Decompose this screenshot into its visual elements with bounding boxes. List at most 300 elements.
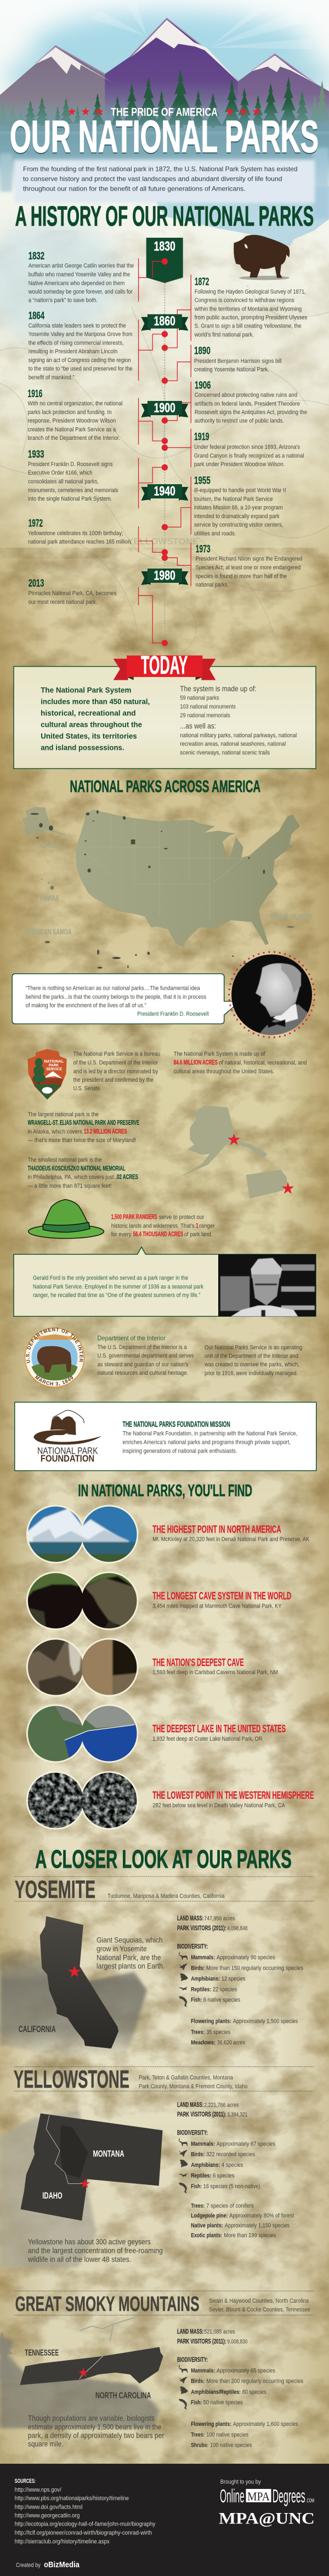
intro paragraph [23, 165, 297, 193]
map shape: Hawaii [41, 879, 54, 890]
yosemite heading band [15, 1875, 314, 1903]
yellowstone heading band: Park, Teton & Gallatin Counties, Montana [139, 2075, 233, 2081]
footer credit [16, 2560, 80, 2569]
callout: Franklin D. Roosevelt quote [12, 974, 240, 1024]
yellowstone statistics: 7 species of conifers [206, 2203, 254, 2210]
text: deepest lake: 1,932 feet deep at Crater Lake National Park, OR [152, 1736, 262, 1742]
footer sources: http://ecotopia.org/ecology-hall-of-fame/john-muir/biography [15, 2521, 156, 2528]
text: 84.6 million acres: 84.6 MILLION ACRES [174, 1058, 218, 1066]
yellowstone map: Montana and Idaho [0, 2110, 163, 2268]
today summary text: and island possessions. [41, 743, 124, 751]
timeline markers [162, 259, 168, 646]
text: 84.6 million acres [174, 1051, 307, 1075]
logo: National Park Foundation [33, 1410, 102, 1464]
entry 1933: into the single National Park System. [28, 496, 112, 502]
entry 1832: a “nation’s park” to save both. [29, 297, 98, 304]
map shape: contiguous United States [76, 810, 300, 1018]
great smoky statistics: 50 native species [203, 2400, 243, 2406]
yellowstone statistics: BIODIVERSITY: [177, 2130, 208, 2137]
text: smallest national park: THADDEUS KOSCIUSZKO NATIONAL MEMORIAL [27, 1164, 125, 1172]
text: largest national park: WRANGELL-ST. ELIAS NATIONAL PARK AND PRESERVE [27, 1119, 139, 1127]
yosemite statistics: PARK VISITORS (2011): [177, 1925, 226, 1932]
decade ribbon: 1860 [141, 314, 188, 331]
yosemite statistics: Amphibians: [191, 1976, 220, 1982]
timeline entries: left column [27, 250, 134, 605]
entry 1973: national parks. [196, 582, 229, 588]
yosemite statistics: Approximately 1,500 species [233, 2018, 298, 2025]
footer sources: http://www.nps.gov/ [15, 2487, 61, 2493]
text: foundation mission: The National Park Foundation, in partnership with the National Park Service, [123, 1431, 297, 1437]
text: operating unit [204, 1344, 302, 1377]
great smoky fact: bears [28, 2414, 164, 2448]
yosemite statistics: Reptiles: [191, 1986, 211, 1993]
yosemite statistics: BIODIVERSITY: [177, 1944, 208, 1950]
great smoky fact: bears: estimate approximately 1,500 bears live in the [28, 2423, 161, 2431]
entry 1832 [28, 250, 134, 304]
footer sponsors: Brought to you by [220, 2479, 261, 2486]
yosemite map: California [0, 1916, 147, 2058]
text: foundation mission [123, 1420, 297, 1454]
great smoky statistics: LAND MASS: [177, 2329, 203, 2336]
entry 1933: 1933 [28, 449, 44, 461]
today system list: ...as well as: [180, 722, 216, 730]
great smoky statistics: BIODIVERSITY: [177, 2357, 208, 2363]
text: foundation mission: enriches America’s national parks and programs through private support, [123, 1439, 291, 1445]
great smoky statistics: 100 native species [210, 2442, 252, 2449]
entry 1973 [196, 543, 302, 588]
great smoky statistics: Birds: [191, 2378, 205, 2385]
today system list: The system is made up of: [180, 685, 257, 693]
yosemite fact: sequoias: grow in Yosemite [97, 1945, 147, 1953]
yellowstone fact: geysers: and the largest concentration of free-roaming [28, 2247, 163, 2255]
footer sponsors: MPA@UNC [219, 2509, 315, 2527]
text: smallest national park [27, 1157, 138, 1189]
yellowstone heading band [14, 2066, 314, 2093]
today summary text: includes more than 450 natural, [41, 697, 150, 705]
decade ribbon: 1980: 1980 [154, 568, 175, 583]
icon: bison [234, 235, 290, 280]
entry 1919: park under President Woodrow Wilson. [194, 461, 285, 468]
great smoky fact: bears: square mile. [28, 2440, 64, 2448]
entry 1916: With no central organization, the national [27, 400, 123, 407]
panel: today [14, 651, 316, 768]
footer sources: http://www.georgecatlin.org [15, 2512, 80, 2519]
text: highest point: Mt. McKinley at 20,320 feet in Denali National Park and Preserve, AK [152, 1536, 310, 1543]
entry 1916: parks lack protection and funding. In [27, 409, 112, 416]
great smoky statistics: Approximately 65 species [217, 2367, 275, 2374]
map label: American Samoa: AMERICAN SAMOA [24, 927, 72, 937]
entry 1864: 1864 [29, 311, 44, 322]
intro paragraph: From the founding of the first national park in 1872, the U.S. National Park System has existed [23, 165, 297, 173]
yosemite statistics: 4,098,848 [227, 1925, 247, 1932]
text: operating unit: unit of the Department of the Interior and [205, 1353, 298, 1359]
text: longest cave: 3,454 miles mapped at Mammoth Cave National Park, KY [152, 1603, 282, 1609]
entry 1955: 1955 [194, 475, 211, 486]
decade ribbon: 1860: 1860 [154, 314, 175, 329]
decade ribbon: 1900: 1900 [154, 400, 175, 415]
text: National Park Service bureau: U.S. Senate. [73, 1086, 101, 1092]
yellowstone statistics: Mammals: [191, 2141, 215, 2147]
entry 1972: Yellowstone celebrates its 100th birthday; [28, 530, 123, 537]
entry 1955 [194, 475, 286, 537]
entry 1916: creates the National Park Service as a [27, 426, 116, 433]
text: operating unit: Our National Parks Service is an operating [205, 1344, 302, 1351]
text: largest national park: 13.2 MILLION ACRES [84, 1128, 127, 1135]
logo: National Park Service arrowhead [28, 1049, 67, 1099]
entry 1916: 1916 [27, 388, 42, 400]
entry 1933: monuments, cemeteries and memorials [28, 487, 118, 494]
text: park rangers: serve to protect our [159, 1214, 205, 1221]
footer sources: http://tclf.org/pioneer/conrad-wirth/biography-conrad-wirth [15, 2530, 152, 2537]
footer sponsors: Online [220, 2486, 245, 2506]
today summary text: historical, recreational and [41, 709, 136, 717]
yosemite fact: sequoias: Giant Sequoias, which [97, 1936, 162, 1944]
entry 1919: Grand Canyon is finally recognized as a national [194, 452, 304, 459]
entry 1832: Native Americans who depended on them [29, 280, 124, 286]
entry 1872: Congress is convinced to withdraw regions [195, 297, 294, 304]
yellowstone statistics: Lodgepole pine: [191, 2213, 228, 2219]
text: smallest national park: in Philadelphia, PA, which covers just [27, 1174, 114, 1181]
today system list: 29 national memorials [180, 712, 230, 719]
portrait: Franklin D. Roosevelt [229, 952, 315, 1041]
entry 1864: resulting in President Abraham Lincoln [29, 348, 117, 355]
entry 1872: within the territories of Montana and Wyoming [194, 306, 302, 312]
great smoky statistics: Amphibians/Reptiles: [191, 2389, 241, 2395]
text: deepest cave [152, 1657, 278, 1676]
great smoky mountains heading band: Sevier, Blount & Cocke Counties, Tennessee [209, 2307, 310, 2313]
great smoky wildlife icons [178, 2364, 188, 2410]
map label: Alaska: ALASKA [39, 841, 59, 850]
callout: Franklin D. Roosevelt quote: “There is nothing so American as our national parks....The fundamental idea [26, 985, 200, 992]
entry 1955: tourism, the National Park Service [194, 496, 273, 502]
today system list: national military parks, national parkways, national [180, 732, 297, 739]
intro paragraph: throughout our nation for the benefit of all future generations of Americans. [23, 185, 246, 193]
logo: National Park Service arrowhead: NATIONAL [44, 1059, 64, 1064]
entry 1872: Following the Hayden Geological Survey of 1871, [195, 289, 306, 295]
great smoky statistics: Mammals: [191, 2367, 215, 2374]
text: park rangers: historic lands and wilderness. That’s [111, 1223, 195, 1229]
great smoky statistics: 521,085 acres [204, 2329, 235, 2336]
yosemite statistics: 36,620 acres [217, 2040, 245, 2046]
logo: National Park Foundation: NATIONAL PARK [37, 1445, 98, 1456]
entry 1919 [194, 431, 304, 468]
yellowstone statistics: Birds: [191, 2152, 205, 2158]
yellowstone statistics: PARK VISITORS (2011): [177, 2112, 226, 2118]
entry 1890: President Benjamin Harrison signs bill [194, 358, 282, 364]
footer sources: http://www.doi.gov/facts.html [15, 2504, 82, 2510]
great smoky statistics: More than 200 regularly occurring species [206, 2378, 304, 2385]
decade ribbon: 1980 [141, 568, 188, 585]
yellowstone statistics: Amphibians: [191, 2162, 220, 2168]
yosemite fact: sequoias: largest plants on Earth. [97, 1962, 164, 1970]
footer credit: Created by [16, 2562, 41, 2568]
yosemite heading band: Tuolumne, Mariposa & Madera Counties, California [107, 1893, 225, 1900]
text: park rangers: 56.4 THOUSAND ACRES [133, 1230, 183, 1238]
binocular view: lowest point [26, 1771, 139, 1829]
great smoky statistics: 100 native species [206, 2431, 249, 2438]
yosemite statistics: LAND MASS: [177, 1915, 203, 1922]
entry 1832: 1832 [29, 250, 44, 262]
entry 1890 [194, 346, 282, 373]
logo: National Park Foundation: FOUNDATION [41, 1453, 94, 1464]
great smoky statistics: Shrubs: [191, 2442, 208, 2449]
today system list [180, 685, 297, 756]
entry 1890: creating Yosemite National Park. [194, 366, 269, 373]
yosemite map: California: CALIFORNIA [19, 2024, 56, 2034]
entry 1919: Under federal protection since 1893, Arizona's [194, 444, 300, 451]
yosemite statistics: Meadows: [191, 2040, 215, 2046]
entry 1872 [194, 277, 308, 338]
panel: Gerald Ford ranger [14, 1247, 316, 1316]
decade ribbon: 1900 [141, 400, 188, 417]
entry 1916: branch of the Department of the Interior. [27, 435, 120, 441]
text: 84.6 million acres: cultural areas throughout the United States. [174, 1068, 274, 1075]
text: National Park Service bureau: and is led by a director nominated by [73, 1068, 158, 1075]
text: park rangers [111, 1213, 215, 1238]
entry 1973: President Richard Nixon signs the Endangered [196, 556, 302, 563]
great smoky statistics: 9,008,830 [227, 2338, 247, 2345]
yellowstone statistics: Approximately 1,150 species [225, 2223, 290, 2229]
entry 1864: benefit of mankind.” [29, 374, 75, 381]
text: Department of the Interior: The U.S. Department of the Interior is a [98, 1344, 187, 1351]
text: smallest national park: .02 ACRES [116, 1173, 138, 1181]
yosemite statistics: Mammals: [191, 1954, 215, 1961]
entry 1864 [29, 311, 133, 381]
entry 1973: 1973 [196, 543, 211, 555]
entry 1906: authority to restrict use of public lands. [195, 418, 284, 424]
yosemite fact: sequoias: National Park, are the [97, 1953, 161, 1961]
timeline spine and connectors [139, 259, 191, 643]
today summary text: The National Park System [41, 686, 132, 694]
today ribbon banner [114, 651, 215, 680]
yellowstone statistics: More than 199 species [224, 2233, 276, 2239]
entry 1872: from public auction, prompting President Ulysses [195, 314, 308, 321]
footer sources [15, 2478, 156, 2545]
decade ribbon: 1940 [141, 484, 188, 501]
yellowstone map: Montana and Idaho: IDAHO [42, 2191, 63, 2201]
yellowstone statistics: 3,394,321 [227, 2112, 247, 2118]
yellowstone wildlife icons [178, 2137, 188, 2194]
binocular view: deepest lake [26, 1705, 138, 1763]
today ribbon banner: TODAY [141, 651, 188, 679]
footer sources: http://sierraclub.org/history/timeline.aspx [15, 2538, 110, 2545]
entry 1832: American artist George Catlin worries that the [29, 263, 134, 269]
yosemite heading band: YOSEMITE [15, 1875, 95, 1903]
entry 1864: Yosemite Valley and the Mariposa Grove from [29, 331, 133, 338]
entry 2013: Pinnacles National Park, CA, becomes [29, 590, 117, 597]
entry 1916: response, President Woodrow Wilson [27, 418, 116, 424]
text: Gerald Ford: National Park Service. Employed in the summer of 1936 as a seasonal park [33, 1283, 204, 1290]
text: deepest lake [152, 1724, 286, 1742]
text: deepest cave: THE NATION'S DEEPEST CAVE [152, 1657, 244, 1669]
entry 1832: buffalo who roamed Yosemite Valley and the [29, 271, 130, 278]
great smoky map: Tennessee and North Carolina [0, 2317, 163, 2428]
logo: National Park Service arrowhead: SERVICE [46, 1066, 62, 1071]
text: 84.6 million acres: The National Park System is made up of [174, 1051, 265, 1058]
yellowstone heading band: YELLOWSTONE [14, 2066, 129, 2093]
yosemite statistics: 6 native species [203, 1997, 241, 2004]
text: Gerald Ford [33, 1275, 204, 1299]
yellowstone map: Montana and Idaho: MONTANA [93, 2149, 124, 2159]
text: largest national park: — that’s more than twice the size of Maryland! [27, 1137, 136, 1144]
entry 1906: 1906 [195, 380, 211, 391]
entry 1973: Species Act; at least one or more endangered [196, 564, 300, 571]
footer [0, 2464, 329, 2576]
entry 1972: 1972 [29, 518, 43, 530]
decade flag: 1830 [146, 238, 183, 283]
yellowstone fact: geysers: wildlife in all of the lower 48 states. [27, 2255, 131, 2263]
yellowstone statistics: 16 species (5 non-native) [203, 2183, 260, 2190]
footer sponsors: .COM [306, 2498, 314, 2504]
entry 1872: world’s first national park. [194, 331, 254, 338]
yellowstone statistics: LAND MASS: [177, 2102, 203, 2108]
great smoky statistics: Flowering plants: [191, 2421, 231, 2428]
map label: Hawaii: HAWAII [40, 893, 59, 903]
great smoky map: Tennessee and North Carolina: TENNESSEE [25, 2349, 59, 2358]
map shape: American Samoa [45, 941, 50, 943]
map shape: Virgin Islands [287, 926, 294, 927]
text: operating unit: was created to oversee the parks, which, [204, 1362, 299, 1368]
entry 1955: utilities and roads. [194, 530, 236, 537]
great smoky fact: bears: park, a density of approximately two bears per [28, 2431, 164, 2440]
text: park rangers: ranger [200, 1223, 215, 1229]
footer sponsors [219, 2479, 315, 2527]
yosemite statistics: Fish: [191, 1997, 202, 2004]
entry 1864: to the state to “be used and preserved for the [29, 366, 133, 372]
yellowstone statistics: Reptiles: [191, 2173, 211, 2179]
entry 1864: California state leaders seek to protect the [29, 323, 126, 329]
yosemite statistics: 35 species [206, 2029, 231, 2035]
entry 1872: S. Grant to sign a bill creating Yellowstone, the [195, 323, 302, 330]
text: Department of the Interior: as steward and guardian of our nation’s [98, 1361, 189, 1368]
map shape: Alaska [22, 807, 71, 847]
binocular view: longest cave [26, 1571, 138, 1630]
yellowstone statistics: 322 recorded species [206, 2152, 256, 2158]
text: operating unit: prior to 1916, were individually managed. [205, 1370, 298, 1377]
entry 1955: intended to dramatically expand park [194, 513, 280, 520]
entry 1864: the effects of rising commercial interests, [29, 340, 124, 347]
great smoky statistics [177, 2329, 304, 2449]
text: highest point [152, 1524, 310, 1543]
map: Alaska with star [180, 1105, 268, 1177]
entry 1955: initiates Mission 66, a 10-year program [194, 504, 283, 511]
entry 1933 [28, 449, 118, 502]
text: National Park Service bureau: The National Park Service is a bureau [73, 1051, 160, 1058]
entry 2013 [29, 578, 117, 605]
great smoky mountains heading band: GREAT SMOKY MOUNTAINS [15, 2293, 200, 2316]
text: longest cave [152, 1591, 291, 1609]
entry 1955: service by constructing visitor centers, [194, 522, 283, 529]
entry 1906: Roosevelt signs the Antiquities Act, providing the [195, 409, 307, 416]
yosemite statistics: Approximately 90 species [217, 1954, 275, 1961]
yellowstone statistics: Approximately 80% of forest [229, 2213, 294, 2219]
text: largest national park: in Alaska, which covers [27, 1128, 83, 1135]
yosemite statistics: 22 species [213, 1986, 237, 1993]
logo: National Park Service arrowhead: PARK [49, 1063, 59, 1068]
today system list: 103 national monuments [180, 703, 236, 710]
binocular view: deepest cave [26, 1638, 138, 1697]
callout: Franklin D. Roosevelt quote: President Franklin D. Roosevelt [137, 1011, 209, 1018]
yosemite statistics: 12 species [222, 1976, 246, 1982]
logo: Department of the Interior seal: MARCH 3, 1849 [35, 1375, 73, 1386]
entry 1955: Ill-equipped to handle post World War II [194, 487, 286, 494]
entry 1864: signing an act of Congress ceding the region [29, 357, 131, 364]
text: park rangers: 1 [196, 1221, 198, 1229]
map: Pennsylvania with star [246, 1170, 294, 1198]
text: deepest cave: 1,593 feet deep in Carlsbad Caverns National Park, NM [152, 1669, 278, 1676]
great smoky mountains heading band: Swain & Haywood Counties, North Carolina [209, 2298, 309, 2304]
text: largest national park: The largest national park is the [27, 1111, 99, 1118]
yellowstone statistics: 4 species [222, 2162, 243, 2168]
entry 1972 [28, 518, 132, 546]
entry 1972: national park attendance reaches 165 million. [28, 539, 132, 546]
text: park rangers: of park land. [184, 1231, 212, 1238]
yellowstone statistics: 2,221,766 acres [204, 2102, 239, 2108]
yosemite wildlife icons [178, 1951, 188, 2007]
today summary text: United States, its territories [41, 732, 137, 740]
yosemite statistics: More than 150 regularly occurring species [206, 1965, 304, 1971]
header illustration: sky, mountains and trees [0, 2, 329, 219]
footer sponsors: MPA [247, 2489, 270, 2503]
yosemite fact: sequoias [97, 1936, 164, 1970]
text: park rangers: 1,500 PARK RANGERS [111, 1213, 157, 1221]
entry 1919: 1919 [194, 431, 209, 443]
entry 1906: artifacts on federal lands, President Theodore [195, 400, 300, 407]
text: foundation mission: inspiring generations of national park enthusiasts. [123, 1448, 237, 1454]
great smoky fact: bears: Though populations are variable, biologists [28, 2414, 155, 2422]
footer credit: oBizMedia [44, 2560, 80, 2569]
today summary text: cultural areas throughout the [41, 720, 142, 728]
text: Gerald Ford: ranger, he recalled that time as “One of the greatest summers of my life.” [33, 1292, 201, 1299]
text: Department of the Interior: natural resources and cultural heritage. [98, 1370, 188, 1376]
great smoky statistics: Approximately 1,600 species [233, 2421, 298, 2428]
decade flag: 1830: 1830 [154, 239, 175, 254]
photo: Gerald Ford [218, 1254, 316, 1316]
yosemite statistics: Trees: [191, 2029, 205, 2035]
yellowstone statistics: Native plants: [191, 2223, 223, 2229]
text: Department of the Interior [98, 1334, 194, 1376]
icon: ranger hat [29, 1200, 104, 1238]
great smoky statistics: 80 species [242, 2389, 266, 2395]
great smoky statistics: Fish: [191, 2400, 202, 2406]
text: Department of the Interior: U.S. governmental department and serves [98, 1353, 194, 1359]
great smoky map: Tennessee and North Carolina: NORTH CAROLINA [95, 2391, 151, 2400]
yellowstone statistics: 6 species [213, 2173, 235, 2179]
text: Department of the Interior: Department of the Interior [98, 1334, 166, 1342]
text: smallest national park: — a little more than 871 square feet! [27, 1183, 112, 1189]
entry 2013: our most recent national park. [29, 599, 97, 605]
today system list: scenic riverways, national scenic trails [180, 750, 270, 756]
yellowstone statistics: Approximately 67 species [217, 2141, 275, 2147]
decade ribbon: 1940: 1940 [154, 484, 175, 498]
yellowstone statistics: Fish: [191, 2183, 202, 2190]
text: National Park Service bureau [73, 1051, 160, 1092]
text: smallest national park: The smallest national park is the [27, 1157, 102, 1163]
page background: YELLOWSTONE [127, 536, 198, 547]
panel: National Park Foundation [15, 1402, 316, 1471]
great smoky statistics: PARK VISITORS (2011): [177, 2338, 226, 2345]
yellowstone fact: geysers: Yellowstone has about 300 active geysers [28, 2238, 151, 2246]
yellowstone statistics [177, 2102, 294, 2239]
callout: Franklin D. Roosevelt quote: behind the parks...is that the country belongs to the people, that it is in process [26, 994, 207, 1000]
yosemite statistics: Flowering plants: [191, 2018, 231, 2025]
yellowstone heading band: Park County, Montana & Fremont County, Idaho [139, 2083, 248, 2090]
text: lowest point [152, 1790, 314, 1809]
today system list: recreation areas, national seashores, national [180, 741, 286, 748]
entry 1906: Concerned about protecting native ruins and [195, 392, 297, 399]
callout: Franklin D. Roosevelt quote: of making for the enrichment of the lives of all of us.” [26, 1002, 146, 1009]
today summary text [41, 686, 150, 751]
